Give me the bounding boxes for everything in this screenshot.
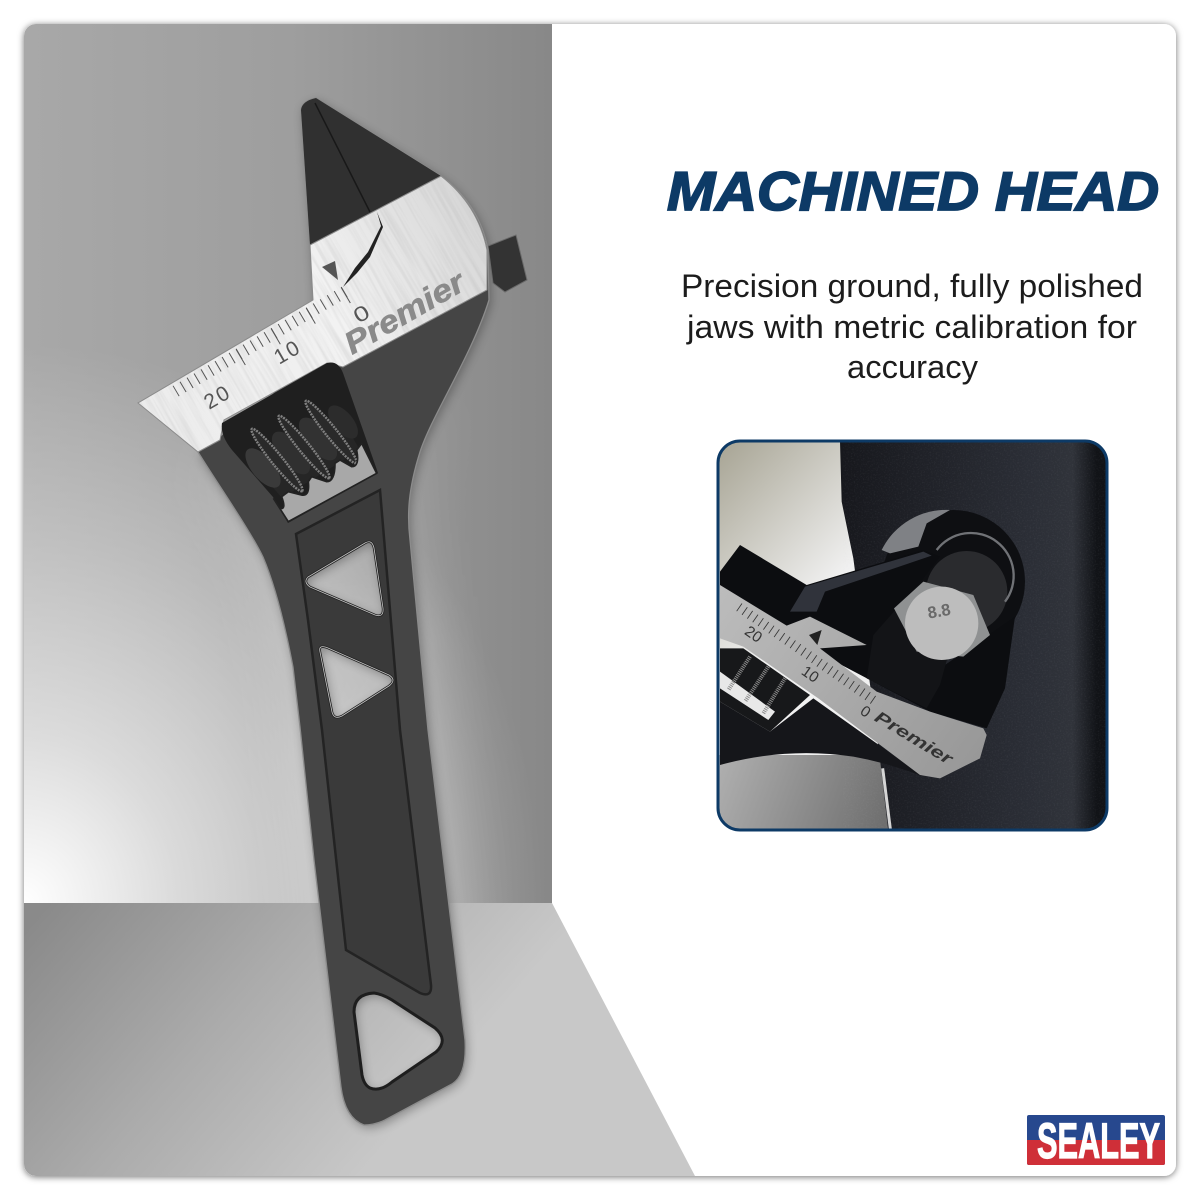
description text: jaws with metric calibration for	[686, 309, 1137, 345]
polished silver head and slider	[138, 176, 487, 452]
bolt	[894, 582, 990, 657]
silver scale	[720, 585, 987, 778]
metric scale ticks	[176, 292, 346, 391]
fixed jaw	[301, 98, 441, 245]
scale numbers: 10	[270, 336, 305, 369]
inset photo: wrench on bolt: 8.8	[926, 600, 952, 623]
handle recessed panel	[296, 490, 431, 994]
title: MACHINED HEAD	[667, 160, 1159, 222]
scale numbers: 20	[200, 381, 235, 414]
nut	[866, 618, 947, 680]
jaw gap	[343, 212, 383, 287]
handle holes rims	[306, 542, 442, 1089]
inset photo: wrench on bolt: Premier	[871, 707, 958, 769]
description text: Precision ground, fully polished	[681, 268, 1143, 304]
scale numbers: 0	[350, 301, 374, 328]
scale numbers	[200, 301, 374, 414]
description text	[681, 268, 1143, 385]
wrench photo illustration	[137, 98, 528, 1126]
brand mark: Premier	[338, 263, 473, 361]
window	[720, 648, 810, 732]
wrench lower body	[720, 698, 923, 777]
icon: wrench adjuster knob	[488, 235, 527, 292]
pointer marker	[322, 261, 338, 280]
inset photo: wrench on bolt	[717, 440, 1110, 832]
adjuster window	[222, 362, 378, 523]
description text: accuracy	[847, 349, 978, 385]
jaw	[720, 545, 1015, 728]
rack teeth	[273, 443, 377, 522]
inset border	[718, 441, 1107, 830]
wrench body	[198, 98, 489, 1125]
inset photo: wrench on bolt: 0	[857, 703, 874, 721]
washer	[884, 510, 1025, 634]
brushed texture	[140, 199, 486, 450]
worm screw	[239, 397, 364, 498]
inset photo: wrench on bolt: 10	[798, 663, 822, 687]
inset photo: wrench on bolt: 20	[741, 623, 765, 647]
panel: product photo backdrop	[24, 24, 695, 1176]
